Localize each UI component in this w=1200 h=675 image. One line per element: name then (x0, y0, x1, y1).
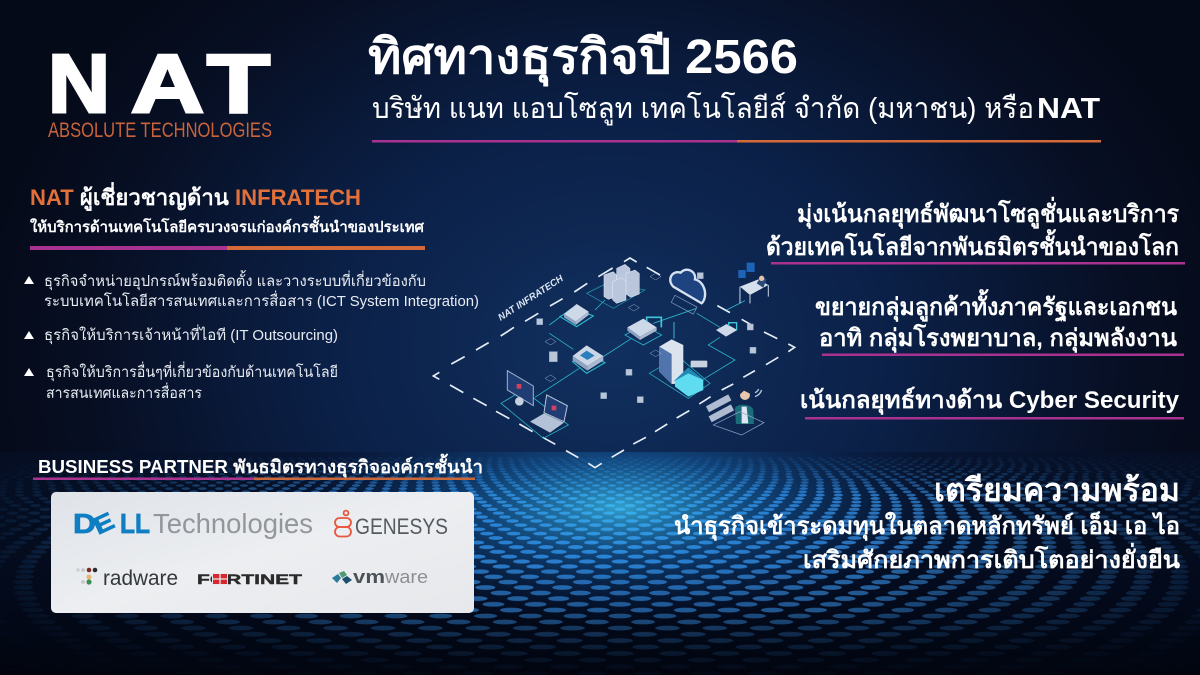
logo: radware: radware (103, 567, 178, 590)
logo: Dell Technologies: Technologies (153, 508, 313, 539)
cloud (670, 270, 705, 314)
strategy: customers (815, 288, 1184, 356)
logo: Genesys: GENESYS (355, 514, 448, 539)
title: NAT (1037, 93, 1100, 125)
bullet 1: ระบบเทคโนโลยีสารสนเทศและการสื่อสาร (ICT System Integration) (44, 290, 479, 310)
title: บริษัท แนท แอบโซลูท เทคโนโลยีส์ จำกัด (มหาชน) หรือ (372, 91, 1034, 126)
strategy: solutions (766, 196, 1185, 264)
title (368, 31, 1101, 142)
logo: VMware: vm (353, 567, 385, 587)
logo: NAT Absolute Technologies: ABSOLUTE TECHNOLOGIES (48, 119, 272, 142)
title: ทิศทางธุรกิจปี 2566 (368, 31, 798, 87)
logo: NAT Absolute Technologies: A (131, 37, 204, 130)
workstation desk (738, 263, 768, 303)
logo: Dell Technologies: L (120, 508, 135, 539)
strategy: customers: อาทิ กลุ่มโรงพยาบาล, กลุ่มพลังงาน (819, 323, 1178, 354)
small device icons (537, 273, 756, 403)
panel: partner logos (51, 492, 474, 613)
list: business lines (24, 270, 479, 402)
logo: VMware: ware (384, 567, 428, 587)
logo: Genesys (335, 511, 448, 539)
heading: NAT infratech expert (30, 181, 425, 250)
logo: NAT Absolute Technologies: T (207, 37, 270, 130)
logo: Dell Technologies: D (73, 508, 96, 539)
heading: NAT infratech expert: ให้บริการด้านเทคโนโลยีครบวงจรแก่องค์กรชั้นนำของประเทศ (30, 215, 424, 236)
diagram: NAT Infratech isometric network (433, 258, 795, 468)
bullet 1: ธุรกิจจำหน่ายอุปกรณ์พร้อมติดตั้ง และวางระบบที่เกี่ยวข้องกับ (44, 270, 426, 291)
logo: Dell Technologies (73, 508, 313, 540)
strategy: customers: ขยายกลุ่มลูกค้าทั้งภาครัฐและเอกชน (815, 288, 1178, 323)
bullet 3: สารสนเทศและการสื่อสาร (46, 382, 202, 402)
network links (501, 283, 745, 438)
diagram label: NAT INFRATECH (496, 273, 566, 324)
bullet 3 (24, 361, 338, 402)
strategy: cyber security: เน้นกลยุทธ์ทางด้าน Cyber Security (800, 386, 1180, 416)
logo: Dell Technologies: L (135, 508, 150, 539)
server racks (604, 264, 639, 303)
callout: IPO preparation: นำธุรกิจเข้าระดมทุนในตลาดหลักทรัพย์ เอ็ม เอ ไอ (674, 511, 1180, 542)
logo: Fortinet (197, 571, 303, 587)
bullet 1 (24, 270, 479, 310)
dashed diamond outline (433, 258, 795, 468)
heading: NAT infratech expert: NAT ผู้เชี่ยวชาญด้าน INFRATECH (30, 181, 361, 212)
logo: NAT Absolute Technologies (48, 37, 272, 142)
logo: Dell Technologies: E (89, 508, 119, 540)
callout: IPO preparation (674, 472, 1181, 574)
callout: IPO preparation: เสริมศักยภาพการเติบโตอย่างยั่งยืน (803, 542, 1181, 574)
bullet 2: ธุรกิจให้บริการเจ้าหน้าที่ไอที (IT Outsourcing) (44, 324, 338, 345)
strategies (766, 196, 1185, 420)
strategy: solutions: มุ่งเน้นกลยุทธ์พัฒนาโซลูชั่นและบริการ (797, 196, 1179, 230)
bullet 3: ธุรกิจให้บริการอื่นๆที่เกี่ยวข้องกับด้านเทคโนโลยี (46, 361, 338, 382)
monitor and laptop (507, 371, 567, 433)
office building and house (659, 322, 707, 397)
support agent (706, 389, 764, 435)
strategy: solutions: ด้วยเทคโนโลยีจากพันธมิตรชั้นนำของโลก (766, 228, 1179, 261)
logo: VMware (332, 567, 428, 587)
callout: IPO preparation: เตรียมความพร้อม (934, 472, 1180, 508)
partner heading: BUSINESS PARTNER พันธมิตรทางธุรกิจองค์กรชั้นนำ (38, 453, 483, 479)
hardware blocks (564, 304, 737, 371)
logo: Fortinet: FORTINET (197, 571, 303, 587)
logo: NAT Absolute Technologies: N (48, 37, 110, 130)
